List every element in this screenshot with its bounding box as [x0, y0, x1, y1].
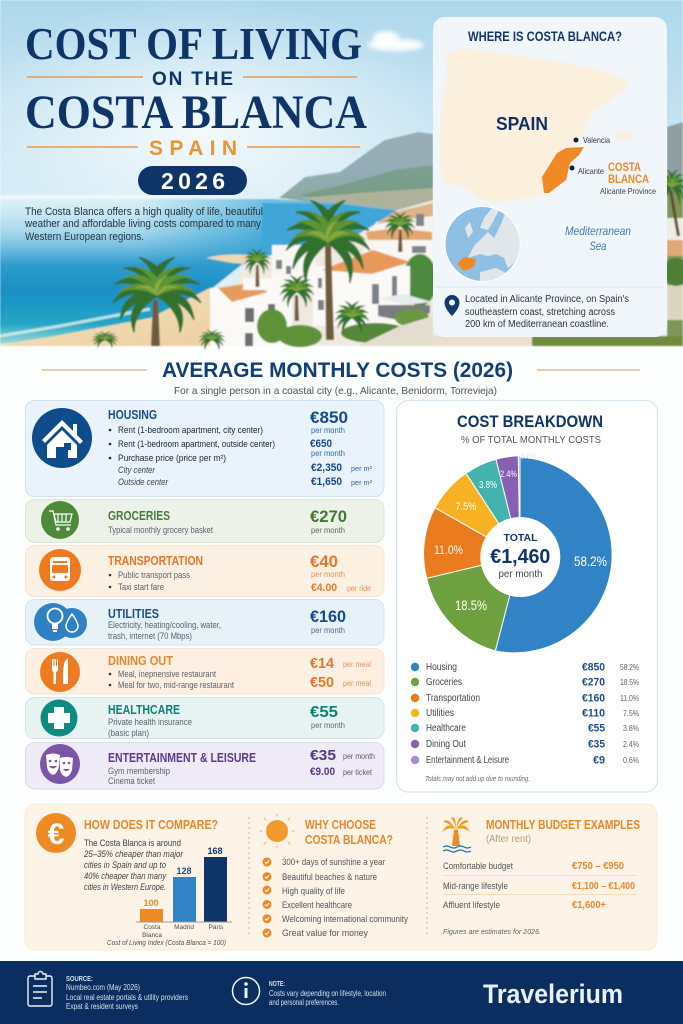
donut labels: 18.5%	[455, 598, 487, 613]
icon: medical cross	[40, 700, 78, 736]
budget table: €1,100 – €1,400	[572, 881, 635, 892]
panel: groceries: GROCERIES	[108, 508, 170, 523]
donut labels: 3.8%	[479, 480, 497, 491]
icon: bus	[39, 549, 81, 591]
icon: shopping cart	[41, 501, 79, 539]
compare paragraph: 40% cheaper than many	[84, 871, 167, 882]
panel: entertainment and leisure: Gym membership	[108, 766, 170, 776]
location note: southeastern coast, stretching across	[465, 307, 615, 318]
source note: Numbeo.com (May 2026)	[66, 983, 140, 992]
legend: 0.6%	[623, 755, 639, 765]
panel: healthcare: per month	[311, 720, 345, 730]
panel: transportation: €40	[310, 552, 338, 571]
panel: bottom comparison strip	[25, 804, 657, 950]
breakdown subheading: % OF TOTAL MONTHLY COSTS	[461, 435, 601, 446]
compare paragraph: 25–35% cheaper than major	[83, 849, 184, 860]
legend: Housing	[426, 662, 457, 673]
budget table: €750 – €950	[572, 861, 624, 872]
section heading: average monthly costs: AVERAGE MONTHLY COSTS (2026)	[162, 359, 513, 382]
panel: entertainment and leisure: ENTERTAINMENT & LEISURE	[108, 750, 256, 765]
housing prices: €850	[310, 408, 348, 427]
legend: 7.5%	[623, 708, 639, 718]
hero illustration: coastal town scene	[0, 0, 683, 350]
panel: housing: HOUSING	[108, 407, 157, 422]
icon: clipboard	[28, 972, 52, 1006]
panel: entertainment and leisure	[26, 742, 384, 789]
housing items	[109, 425, 275, 487]
legend: €160	[582, 692, 605, 704]
why choose checklist: Welcoming international community	[282, 914, 408, 925]
inset globe	[444, 206, 525, 285]
panel: where is Costa Blanca map	[433, 17, 667, 337]
panel: transportation: Public transport pass	[118, 570, 190, 580]
legend: 2.4%	[623, 739, 639, 749]
footer note: NOTE:	[269, 981, 285, 988]
panel: housing: per month	[311, 448, 345, 458]
housing items: Purchase price (price per m²)	[118, 453, 226, 463]
source note	[66, 976, 188, 1011]
footer note	[269, 981, 386, 1007]
panel: groceries: €270	[310, 507, 347, 526]
housing items: Outside center	[118, 477, 169, 487]
sea label: Sea	[590, 241, 606, 253]
bar chart: cost of living index: Paris	[209, 924, 224, 931]
why choose checklist	[262, 857, 408, 939]
panel: groceries: Typical monthly grocery basket	[108, 525, 213, 535]
donut center total: €1,460	[490, 546, 550, 568]
location note	[465, 294, 629, 330]
title line: spain: SPAIN	[149, 137, 237, 160]
panel: healthcare: €55	[310, 704, 338, 721]
hero title block	[24, 18, 367, 243]
Alicante marker	[570, 166, 604, 176]
source note: Local real estate portals & utility providers	[66, 993, 188, 1002]
footer note: Costs vary depending on lifestyle, location	[269, 989, 386, 998]
why choose checklist: Excellent healthcare	[282, 900, 352, 911]
legend: €110	[582, 708, 605, 720]
Valencia marker: Valencia	[583, 135, 610, 145]
why choose heading	[305, 817, 393, 847]
bar chart: cost of living index: Madrid	[174, 924, 194, 931]
legend: Dining Out	[426, 739, 466, 750]
panel: transportation: TRANSPORTATION	[108, 553, 203, 568]
section subheading: For a single person in a coastal city (e.g., Alicante, Benidorm, Torrevieja)	[174, 385, 497, 397]
bar chart: cost of living index	[107, 846, 232, 947]
legend: 3.8%	[623, 723, 639, 733]
Costa Blanca label	[608, 160, 649, 186]
budget note: Figures are estimates for 2026.	[443, 927, 541, 936]
panel: entertainment and leisure: Cinema ticket	[108, 776, 155, 786]
panel: dining out: DINING OUT	[108, 653, 173, 668]
title line: cost of living: COST OF LIVING	[25, 18, 362, 69]
legend: €270	[582, 676, 605, 688]
donut labels: 2.4%	[500, 469, 517, 479]
panel: utilities: UTILITIES	[108, 606, 159, 621]
compare paragraph: cities in Western Europe.	[84, 882, 166, 893]
panel: housing: per m²	[351, 480, 373, 487]
panel: utilities	[26, 600, 384, 645]
rounding note: Totals may not add up due to rounding.	[425, 776, 530, 783]
housing prices: €2,350	[311, 462, 342, 474]
compare paragraph: cities in Spain and up to	[84, 860, 166, 871]
why choose checklist: Great value for money	[282, 928, 368, 939]
panel: transportation: Taxi start fare	[118, 582, 164, 592]
housing items: Rent (1-bedroom apartment, city center)	[118, 425, 263, 435]
panel: groceries: per month	[311, 525, 345, 535]
donut center total: per month	[498, 568, 543, 580]
legend: 18.5%	[620, 677, 639, 687]
panel: dining out: Meal for two, mid-range restaurant	[118, 680, 234, 690]
panel: housing: per month	[311, 425, 345, 435]
location note: 200 km of Mediterranean coastline.	[465, 319, 609, 330]
panel: entertainment and leisure: €9.00	[310, 766, 335, 778]
legend: Utilities	[426, 708, 454, 719]
icon: bulb and water drop	[34, 603, 87, 641]
legend	[411, 662, 639, 766]
footer note: and personal preferences.	[269, 998, 339, 1007]
title line: on the: ON THE	[152, 69, 233, 90]
panel: cost breakdown	[396, 400, 658, 792]
housing items: Rent (1-bedroom apartment, outside center)	[118, 439, 275, 449]
panel: dining out: Meal, inepnensive restaurant	[118, 669, 216, 679]
icon: theatre masks	[40, 744, 80, 784]
intro paragraph: The Costa Blanca offers a high quality of life, beautiful	[25, 206, 263, 218]
section heading: average monthly costs	[42, 359, 640, 397]
intro paragraph: Western European regions.	[25, 231, 144, 243]
panel: healthcare: HEALTHCARE	[108, 702, 180, 717]
donut center total	[490, 532, 550, 580]
panel: dining out: per meal	[343, 659, 371, 669]
housing prices: €1,650	[311, 476, 342, 488]
donut labels: 11.0%	[434, 543, 463, 557]
panel: entertainment and leisure: €35	[310, 747, 336, 764]
icon: fork and knife	[40, 652, 80, 692]
panel: entertainment and leisure: per ticket	[343, 767, 373, 777]
donut labels: 0.6%	[520, 451, 538, 461]
sea label	[565, 226, 631, 253]
budget table	[443, 861, 636, 911]
map heading: WHERE IS COSTA BLANCA?	[468, 29, 622, 44]
legend: Groceries	[426, 677, 462, 688]
compare paragraph: The Costa Blanca is around	[84, 838, 181, 849]
icon: house	[32, 408, 92, 468]
panel: healthcare: Private health insurance	[108, 717, 192, 727]
icon: euro coin	[36, 813, 76, 853]
budget heading: MONTHLY BUDGET EXAMPLES	[486, 818, 640, 832]
donut labels: 58.2%	[574, 553, 607, 569]
housing prices	[310, 408, 348, 488]
bar chart: cost of living index: 168	[207, 846, 223, 856]
breakdown heading: COST BREAKDOWN	[457, 412, 603, 431]
why choose heading: COSTA BLANCA?	[305, 832, 393, 847]
source note: SOURCE:	[66, 976, 93, 983]
budget table: Affluent lifestyle	[443, 900, 500, 911]
legend: €9	[593, 754, 605, 766]
legend: Transportation	[426, 693, 480, 704]
title line: costa blanca: COSTA BLANCA	[25, 86, 367, 139]
panel: utilities: per month	[311, 625, 345, 635]
footer	[0, 961, 683, 1024]
panel: housing	[26, 400, 384, 496]
sea label: Mediterranean	[565, 226, 631, 238]
legend: Entertainment & Leisure	[426, 755, 509, 766]
donut labels: 7.5%	[456, 501, 477, 513]
bar chart: cost of living index: Costa	[144, 924, 161, 931]
bar chart: cost of living index: Blanca	[142, 932, 162, 939]
why choose checklist: 300+ days of sunshine a year	[282, 857, 385, 868]
icon: info	[232, 978, 260, 1004]
map of Spain	[440, 48, 627, 203]
legend: €850	[582, 662, 605, 674]
bar chart: cost of living index: 100	[143, 898, 159, 908]
icon: euro coin: €	[48, 818, 65, 851]
legend: €35	[588, 738, 605, 750]
Alicante marker: Alicante	[578, 166, 604, 176]
budget table: Comfortable budget	[443, 861, 513, 872]
Costa Blanca label: BLANCA	[608, 172, 649, 186]
Alicante Province label: Alicante Province	[600, 186, 656, 196]
intro paragraph: weather and affordable living costs compared to many	[24, 218, 261, 230]
Costa Blanca highlight	[542, 147, 584, 193]
panel: transportation: €4.00	[311, 582, 337, 594]
housing items: City center	[118, 465, 156, 475]
label: Spain: SPAIN	[496, 114, 548, 134]
legend: 11.0%	[620, 693, 639, 703]
year badge: 2026	[161, 168, 225, 194]
bar chart: cost of living index: Cost of Living Index (Costa Blanca = 100)	[107, 938, 226, 947]
intro paragraph	[24, 206, 263, 243]
Valencia marker	[574, 135, 610, 145]
panel: dining out: per meal	[343, 678, 371, 688]
donut chart	[424, 451, 612, 653]
housing prices: €650	[310, 438, 332, 450]
Costa Blanca label: COSTA	[608, 160, 641, 174]
donut center total: TOTAL	[503, 532, 538, 544]
panel: healthcare	[26, 698, 384, 738]
compare paragraph	[83, 838, 184, 893]
budget table: Mid-range lifestyle	[443, 881, 508, 892]
panel: utilities: Electricity, heating/cooling, water,	[108, 620, 221, 630]
why choose checklist: High quality of life	[282, 886, 345, 897]
panel: groceries	[26, 500, 384, 542]
panel: housing: per m²	[351, 466, 373, 473]
panel: utilities: €160	[310, 607, 346, 626]
icon: location pin	[444, 295, 460, 316]
brand wordmark: Travelerium	[483, 979, 623, 1009]
location note: Located in Alicante Province, on Spain's	[465, 294, 629, 305]
compare heading: HOW DOES IT COMPARE?	[84, 818, 218, 832]
why choose heading: WHY CHOOSE	[305, 817, 376, 832]
icon: sun	[260, 814, 294, 848]
source note: Expat & resident surveys	[66, 1002, 138, 1011]
legend: 58.2%	[620, 662, 639, 672]
panel: dining out	[26, 648, 384, 694]
panel: utilities: trash, internet (70 Mbps)	[108, 631, 192, 641]
donut labels	[434, 451, 607, 613]
panel: dining out: €50	[310, 674, 334, 691]
legend: Healthcare	[426, 723, 466, 734]
panel: healthcare: (basic plan)	[108, 728, 149, 738]
budget table: €1,600+	[572, 900, 606, 911]
panel: entertainment and leisure: per month	[343, 751, 375, 761]
bar chart: cost of living index: 128	[176, 866, 192, 876]
panel: bottom comparison strip: (After rent)	[486, 834, 531, 845]
year badge	[138, 166, 247, 195]
panel: transportation: per ride	[347, 583, 371, 593]
why choose checklist: Beautiful beaches & nature	[282, 872, 377, 883]
panel: transportation: per month	[311, 569, 345, 579]
legend: €55	[588, 722, 605, 734]
panel: dining out: €14	[310, 655, 335, 672]
panel: transportation	[26, 546, 384, 596]
icon: palm and waves	[442, 817, 471, 852]
